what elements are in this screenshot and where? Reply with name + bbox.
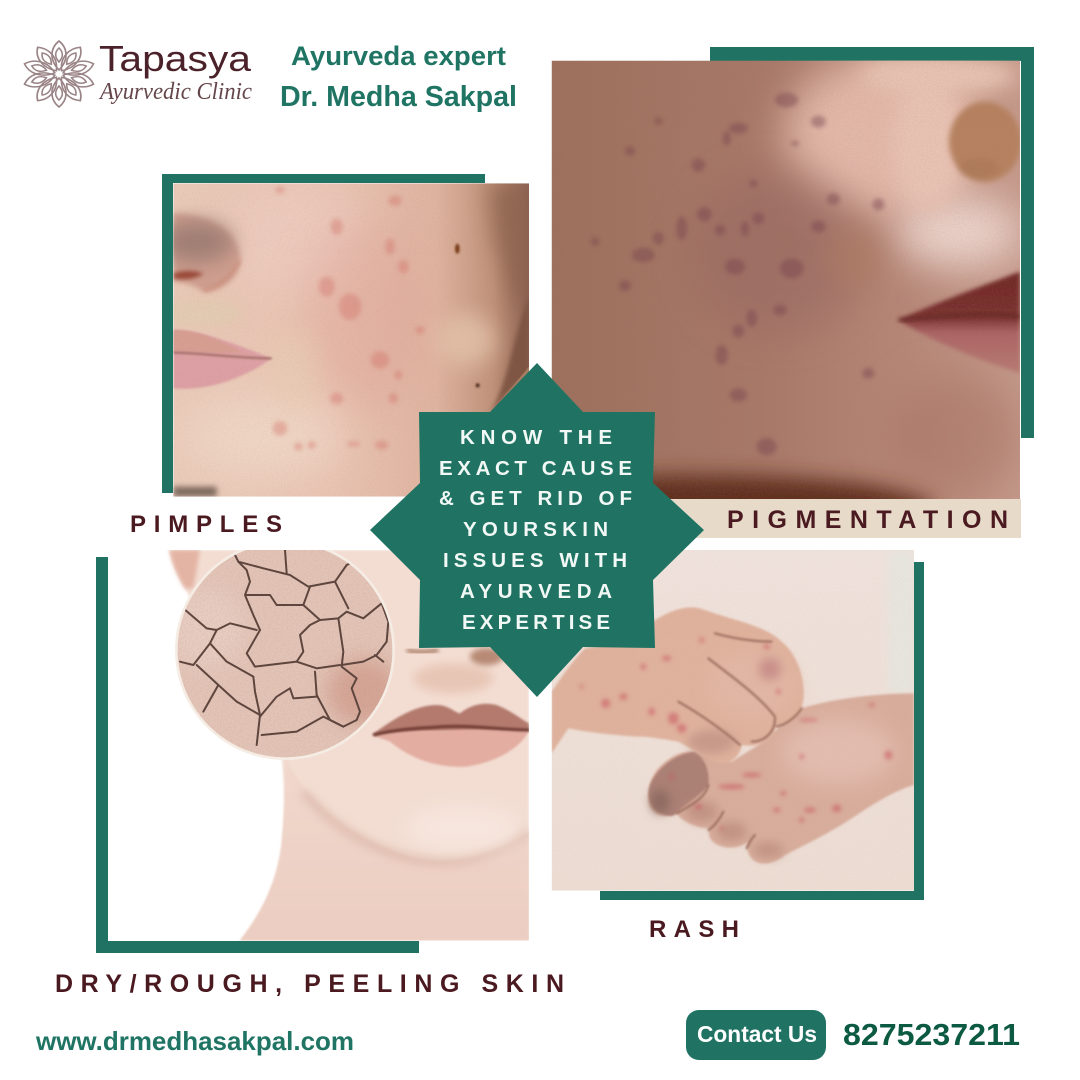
logo (22, 38, 252, 107)
photo: pimples (160, 183, 529, 497)
logo name: Tapasya (99, 38, 252, 79)
frame: pimples green corner (162, 174, 485, 493)
label: dry rough peeling skin: DRY/ROUGH, PEELING SKIN (55, 970, 564, 998)
panel: rash (552, 550, 924, 943)
photo: dry skin (168, 540, 529, 941)
panel: pimples (130, 174, 529, 538)
heading line 2: Dr. Medha Sakpal (280, 81, 517, 113)
label: pimples: PIMPLES (130, 511, 282, 538)
photo: rash (552, 550, 914, 891)
logo subtitle: Ayurvedic Clinic (98, 79, 252, 105)
button shape (686, 1010, 826, 1060)
callout: eight-point star (370, 363, 704, 697)
label band: pigmentation (640, 499, 1021, 538)
callout text (439, 426, 632, 634)
heading: expert name (280, 41, 517, 113)
callout text: YOURSKIN (463, 518, 608, 541)
heading line 1: Ayurveda expert (291, 41, 506, 71)
frame: pigmentation green corner (710, 47, 1034, 438)
callout text: KNOW THE (460, 426, 612, 449)
label: rash: RASH (649, 916, 739, 943)
magnified circle: cracked skin (170, 540, 400, 760)
star shape (370, 363, 704, 697)
phone number: 8275237211 (843, 1017, 1020, 1052)
panel: pigmentation (552, 47, 1034, 538)
photo: pigmentation (552, 60, 1020, 499)
callout text: EXACT CAUSE (439, 457, 632, 480)
callout text: EXPERTISE (462, 611, 610, 634)
frame: rash green corner (600, 562, 924, 900)
button text: Contact Us (697, 1021, 817, 1047)
icon: lotus mandala (22, 41, 96, 107)
callout text: ISSUES WITH (443, 549, 627, 572)
upper hand (552, 607, 804, 764)
callout text: AYURVEDA (460, 580, 612, 603)
lower hand (648, 693, 914, 864)
website url: www.drmedhasakpal.com (35, 1026, 354, 1056)
label: pigmentation: PIGMENTATION (727, 506, 1008, 534)
contact button (686, 1010, 826, 1060)
callout text: & GET RID OF (439, 487, 632, 510)
frame: dry skin green corner (96, 557, 419, 953)
panel: dry rough peeling skin (55, 540, 564, 998)
